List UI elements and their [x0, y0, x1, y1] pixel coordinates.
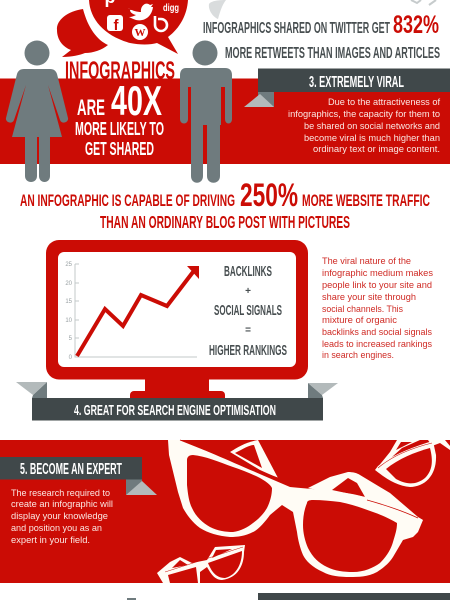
text: are 40x more likely to get shared: GET SHARED — [85, 139, 154, 159]
ribbon fold: section 4 right — [308, 383, 338, 398]
lens left — [187, 455, 272, 532]
right temple — [308, 472, 423, 520]
text: backlinks formula: BACKLINKS — [224, 263, 272, 280]
heading bar: next section — [258, 593, 450, 600]
heading: 5. become an expert: 5. BECOME AN EXPERT — [20, 461, 122, 478]
stat: 250%: 250% — [240, 177, 298, 213]
panel: red band top — [0, 78, 450, 164]
text: backlinks formula: HIGHER RANKINGS — [209, 342, 287, 359]
text: seo body: share your site through — [322, 292, 416, 302]
text: extremely viral body: infographics, the capacity for them to — [288, 109, 440, 119]
icon: small glasses — [157, 545, 245, 583]
line chart: 5 — [69, 336, 73, 342]
text: backlinks formula: = — [245, 325, 251, 336]
line chart: 25 — [65, 262, 73, 268]
text: extremely viral body: become viral is much higher than — [304, 133, 440, 143]
text: backlinks formula: + — [245, 286, 251, 297]
text: seo body: in search engines. — [322, 350, 394, 360]
icon: monitor — [46, 240, 308, 403]
line chart: 10 — [65, 318, 73, 324]
ribbon fold: section 4 left — [16, 382, 47, 398]
lens right — [303, 500, 397, 572]
text: expert body: expert in your field. — [11, 535, 90, 545]
heading: 3. extremely viral — [258, 68, 450, 92]
heading: infographics: INFOGRAPHICS — [65, 57, 175, 85]
heading: traffic statistic — [20, 177, 430, 232]
text: extremely viral body: Due to the attractiveness of — [328, 97, 440, 107]
text: backlinks formula: SOCIAL SIGNALS — [214, 302, 282, 319]
heading: 4. great for search engine optimisation — [32, 398, 323, 420]
text: seo body: social channels. This — [322, 304, 403, 314]
heading: traffic statistic: AN INFOGRAPHIC IS CAPABLE OF DRIVING — [20, 191, 235, 210]
text: extremely viral body — [288, 97, 440, 154]
text: expert body: and position you as an — [11, 523, 102, 533]
text: expert body — [11, 488, 113, 545]
heading: 4. great for search engine optimisation: 4. GREAT FOR SEARCH ENGINE OPTIMISATION — [74, 402, 276, 419]
icon: digg: digg — [163, 2, 179, 14]
line chart: 20 — [65, 281, 73, 287]
text: extremely viral body: be shared on social networks and — [304, 121, 440, 131]
left temple — [230, 440, 278, 478]
icon: woman figure — [6, 40, 68, 182]
text: seo body: infographic medium makes — [322, 268, 433, 278]
line chart: 0 — [69, 355, 73, 361]
panel: red band expert — [0, 440, 450, 583]
icon: map decoration right — [411, 0, 436, 5]
text: twitter statistic — [203, 11, 440, 62]
heading: 5. become an expert — [0, 457, 142, 480]
icon: large glasses — [168, 440, 423, 577]
text: expert body: create an infographic will — [11, 499, 113, 509]
icon: next section icon top — [127, 598, 136, 600]
icon: twitter bird — [128, 4, 153, 20]
text: expert body: display your knowledge — [11, 511, 108, 521]
text: are 40x more likely to get shared: 40X — [111, 77, 162, 124]
icon: facebook: f — [114, 17, 120, 34]
text: seo body — [322, 256, 433, 360]
ribbon fold: section 3 — [244, 92, 274, 107]
line chart — [65, 262, 199, 361]
ribbon fold: section 5 — [126, 479, 157, 495]
icon: man figure — [180, 40, 232, 183]
text: seo body: leads to increased rankings — [322, 339, 432, 349]
icon: large speech bubble with social icons — [89, 0, 188, 54]
icon: wordpress: W — [134, 27, 146, 39]
text: are 40x more likely to get shared: ARE — [77, 95, 105, 120]
text: extremely viral body: ordinary text or image content. — [313, 144, 440, 154]
text: backlinks formula — [209, 263, 287, 359]
icon: small speech bubble — [57, 9, 108, 57]
icon: top right glasses — [375, 440, 450, 487]
icon: map decoration left — [209, 0, 226, 19]
text: expert body: The research required to — [11, 488, 110, 498]
frame — [168, 440, 423, 577]
icon: blogger b — [155, 16, 167, 31]
text: seo body: mixture of organic — [322, 315, 397, 325]
text: are 40x more likely to get shared — [75, 77, 164, 159]
line chart: 15 — [65, 299, 73, 305]
text: seo body: The viral nature of the — [322, 256, 411, 266]
text: are 40x more likely to get shared: MORE LIKELY TO — [75, 119, 164, 139]
frame highlight lines — [180, 440, 418, 518]
text: seo body: backlinks and social signals — [322, 327, 432, 337]
text: seo body: people link to your site and — [322, 280, 432, 290]
